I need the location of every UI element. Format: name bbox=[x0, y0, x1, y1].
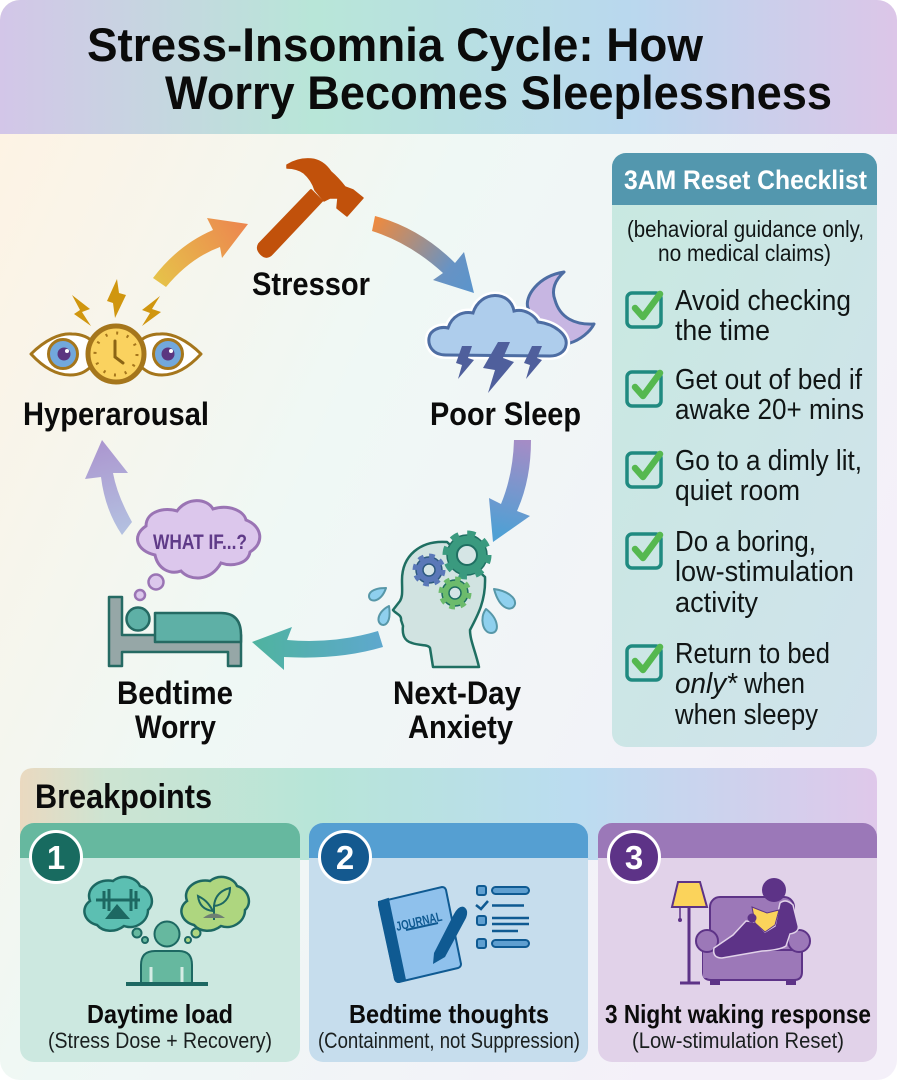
card 2: bedtime thoughts bbox=[309, 823, 588, 1062]
label: next-day anxiety: Anxiety bbox=[408, 709, 513, 745]
heading: breakpoints: Breakpoints bbox=[35, 778, 212, 816]
icon: stress and recovery thoughts bbox=[84, 877, 249, 984]
checklist item 2: Get out of bed if bbox=[675, 364, 863, 396]
checklist item 4: activity bbox=[675, 587, 758, 619]
panel: 3AM reset checklist bbox=[612, 153, 877, 747]
checklist item 2: awake 20+ mins bbox=[675, 394, 864, 426]
checklist item 1: Avoid checking bbox=[675, 285, 851, 317]
checklist item 4: Do a boring, bbox=[675, 526, 816, 558]
card 2: bedtime thoughts: 2 bbox=[336, 839, 354, 876]
card 2: bedtime thoughts: (Containment, not Suppression) bbox=[318, 1028, 580, 1053]
card 3: night waking response: (Low-stimulation Reset) bbox=[632, 1028, 844, 1053]
card 1: daytime load: 1 bbox=[47, 839, 65, 876]
icon: reading on armchair under lamp bbox=[672, 878, 810, 985]
checklist item 3: quiet room bbox=[675, 475, 800, 507]
icon: bed with worry bubble: WHAT IF...? bbox=[153, 531, 247, 554]
checklist item 3: Go to a dimly lit, bbox=[675, 445, 862, 477]
icon: journal and list bbox=[379, 886, 529, 982]
checklist item 2 bbox=[625, 368, 864, 420]
icon: eyes and clock bbox=[31, 279, 201, 382]
card 1: daytime load: (Stress Dose + Recovery) bbox=[48, 1028, 272, 1053]
label: bedtime worry: Bedtime bbox=[117, 675, 233, 711]
arrow: hyperarousal to stressor bbox=[153, 218, 248, 287]
panel: breakpoints bbox=[20, 768, 877, 1062]
icon: bed with worry bubble bbox=[109, 501, 260, 666]
label: hyperarousal: Hyperarousal bbox=[23, 396, 209, 432]
checklist item 1: the time bbox=[675, 315, 770, 347]
label: next-day anxiety bbox=[394, 682, 521, 744]
checklist item 5: when bbox=[743, 668, 805, 700]
panel: 3AM reset checklist: no medical claims) bbox=[658, 240, 831, 266]
card 3: night waking response: 3 bbox=[625, 839, 643, 876]
arrow: next-day anxiety to bedtime worry bbox=[252, 627, 383, 670]
card 3: night waking response bbox=[598, 823, 877, 1062]
icon: cloud with moon bbox=[429, 272, 594, 393]
label: stressor: Stressor bbox=[252, 266, 370, 302]
checklist item 4 bbox=[627, 526, 854, 619]
checklist item 5: only* bbox=[675, 668, 739, 700]
checklist item 3 bbox=[627, 445, 862, 507]
label: bedtime worry bbox=[118, 680, 232, 744]
card 1: daytime load: Daytime load bbox=[87, 999, 233, 1029]
checklist item 5: Return to bed bbox=[675, 638, 830, 670]
card 1: daytime load bbox=[20, 823, 300, 1062]
icon: journal and list: JOURNAL bbox=[394, 909, 444, 934]
icon: head with gears bbox=[369, 534, 515, 667]
card 2: bedtime thoughts: Bedtime thoughts bbox=[349, 999, 549, 1029]
title banner: Worry Becomes Sleeplessness bbox=[165, 66, 832, 119]
arrow: poor sleep to next-day anxiety bbox=[489, 440, 531, 542]
label: poor sleep: Poor Sleep bbox=[430, 396, 581, 432]
arrow: bedtime worry to hyperarousal bbox=[85, 440, 132, 535]
checklist item 1 bbox=[625, 289, 850, 340]
label: bedtime worry: Worry bbox=[135, 709, 216, 745]
title banner bbox=[0, 0, 897, 134]
title banner: Stress-Insomnia Cycle: How bbox=[87, 18, 703, 71]
panel: 3AM reset checklist: (behavioral guidance only, bbox=[627, 216, 864, 242]
checklist item 5 bbox=[627, 638, 830, 731]
checklist item 5: when sleepy bbox=[674, 699, 818, 731]
label: next-day anxiety: Next-Day bbox=[393, 675, 521, 711]
icon: hammer bbox=[258, 159, 363, 257]
checklist item 4: low-stimulation bbox=[675, 556, 854, 588]
panel: 3AM reset checklist: 3AM Reset Checklist bbox=[624, 165, 867, 195]
arrow: stressor to poor sleep bbox=[372, 216, 474, 293]
